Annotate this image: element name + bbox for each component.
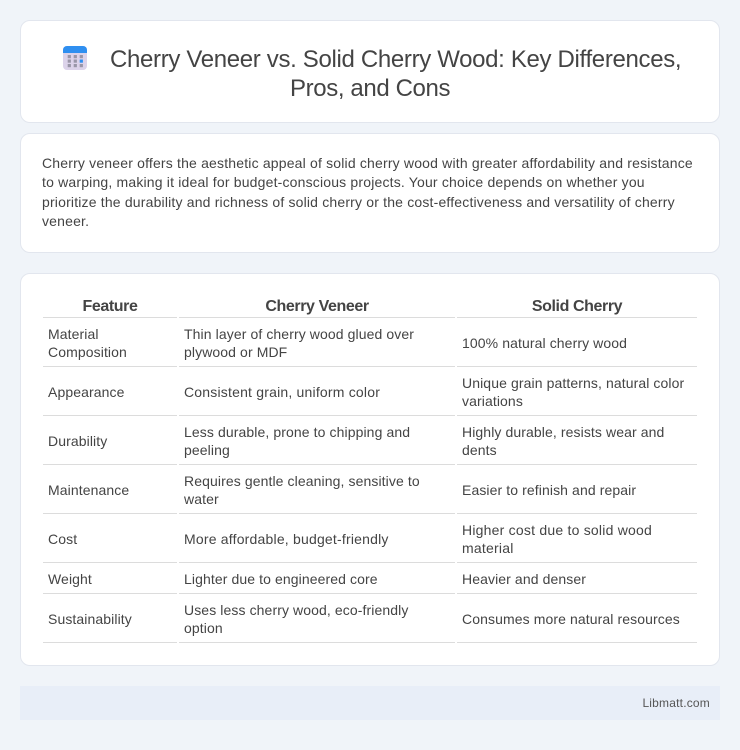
row: Weight xyxy=(48,571,586,587)
row: Cost: Higher cost due to solid wood xyxy=(462,522,652,538)
row: Maintenance: Easier to refinish and repair xyxy=(462,482,636,498)
row: Durability: Durability xyxy=(48,433,107,449)
row: Appearance: variations xyxy=(462,393,523,409)
panel: comparison table card xyxy=(20,273,720,666)
header: Solid Cherry: Solid Cherry xyxy=(532,298,622,315)
summary paragraph: Cherry veneer offers the aesthetic appeal of solid cherry wood with greater affordability and resistance xyxy=(42,155,693,171)
header: Feature: Feature xyxy=(82,298,138,315)
summary paragraph: prioritize the durability and richness of solid cherry or the cost-effectiveness and versatility of cherry xyxy=(42,194,675,210)
row: Maintenance: Maintenance xyxy=(48,482,129,498)
row: Appearance: Appearance xyxy=(48,384,125,400)
row: Cost: Cost xyxy=(48,531,77,547)
comparison table xyxy=(43,298,697,643)
panel: summary text xyxy=(20,133,720,253)
row: Sustainability: option xyxy=(184,620,223,636)
row: Material Composition: 100% natural cherry wood xyxy=(462,335,627,351)
row: Cost: More affordable, budget-friendly xyxy=(184,531,389,547)
row: Maintenance: Requires gentle cleaning, sensitive to xyxy=(184,473,420,489)
row: Cost: material xyxy=(462,540,514,556)
row: Weight: Lighter due to engineered core xyxy=(184,571,378,587)
row: Appearance: Consistent grain, uniform color xyxy=(184,384,380,400)
icon: calendar xyxy=(63,46,87,70)
row: Weight: Heavier and denser xyxy=(462,571,586,587)
summary paragraph xyxy=(42,155,693,229)
header: Cherry Veneer: Cherry Veneer xyxy=(265,298,369,315)
row: Material Composition: Thin layer of cherry wood glued over xyxy=(184,326,414,342)
title: Cherry Veneer vs. Solid Cherry Wood: Key Differences, xyxy=(110,46,681,73)
row: Appearance xyxy=(48,375,684,409)
row: Material Composition: Material xyxy=(48,326,99,342)
row: Sustainability: Sustainability xyxy=(48,611,132,627)
footer text: Libmatt.com xyxy=(642,696,710,710)
row: Durability: Less durable, prone to chipping and xyxy=(184,424,410,440)
row: Material Composition xyxy=(48,326,627,360)
row: Sustainability: Consumes more natural resources xyxy=(462,611,680,627)
footer bar xyxy=(20,686,720,720)
row: Durability: dents xyxy=(462,442,497,458)
row: Maintenance: water xyxy=(184,491,219,507)
row: Durability: peeling xyxy=(184,442,230,458)
row: Appearance: Unique grain patterns, natural color xyxy=(462,375,684,391)
title: Pros, and Cons xyxy=(290,75,450,102)
row: Cost xyxy=(48,522,652,556)
row: Sustainability: Uses less cherry wood, eco-friendly xyxy=(184,602,408,618)
summary paragraph: veneer. xyxy=(42,213,89,229)
row: Material Composition: Composition xyxy=(48,344,127,360)
title xyxy=(110,46,681,102)
row: Maintenance xyxy=(48,473,636,507)
row: Weight: Weight xyxy=(48,571,92,587)
summary paragraph: to warping, making it ideal for budget-conscious projects. Your choice depends on whether you xyxy=(42,174,645,190)
row: Durability: Highly durable, resists wear and xyxy=(462,424,664,440)
row: Durability xyxy=(48,424,664,458)
panel: title card xyxy=(20,20,720,123)
row: Sustainability xyxy=(48,602,680,636)
row: Material Composition: plywood or MDF xyxy=(184,344,287,360)
